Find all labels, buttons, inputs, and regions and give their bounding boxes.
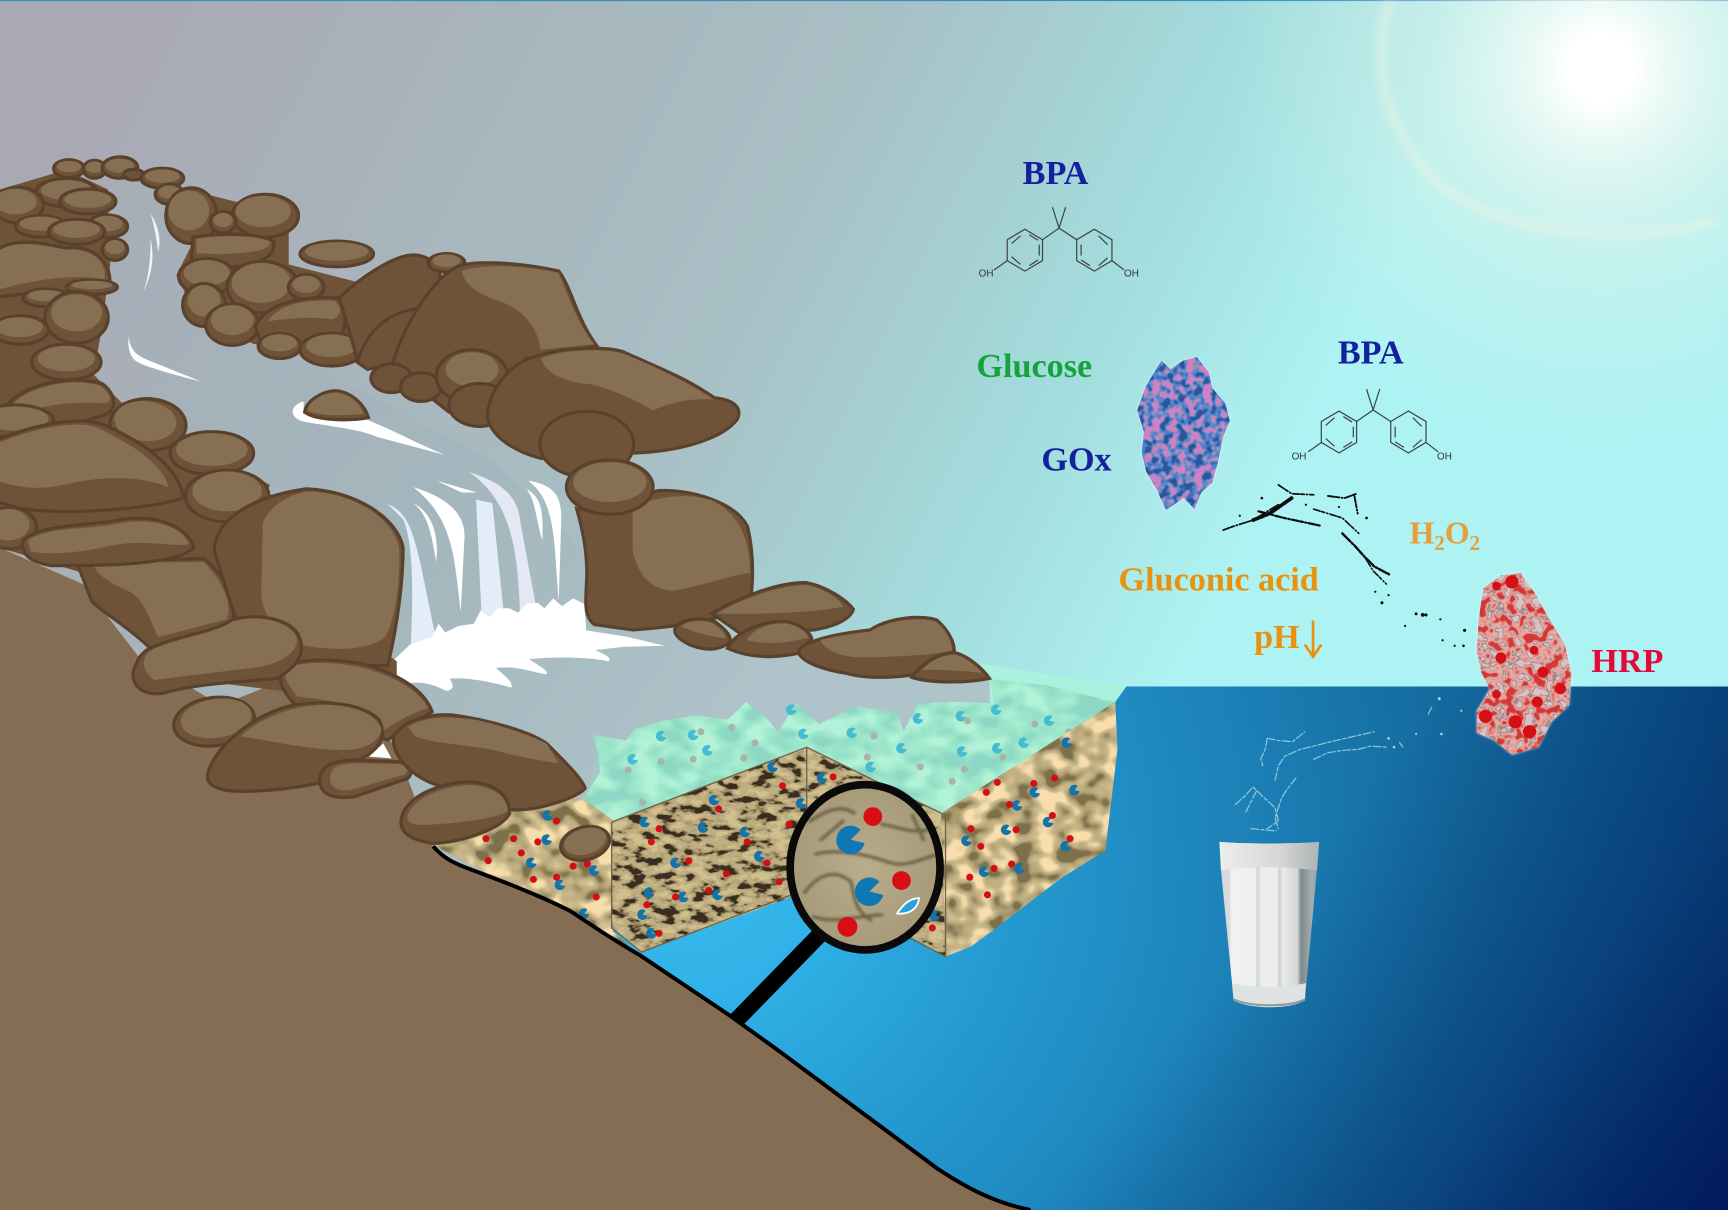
porous composite block	[435, 663, 1126, 961]
right pillar	[577, 490, 753, 630]
sun glow	[1212, 0, 1728, 452]
hillside black edge	[433, 846, 1030, 1210]
glass base shadow	[1234, 1000, 1305, 1005]
HRP active red patches	[1479, 575, 1566, 738]
block left face	[435, 798, 645, 961]
lens fill	[790, 785, 940, 950]
pH label: pH	[1254, 619, 1300, 656]
rock mass backing: middle stack	[170, 190, 375, 364]
sea deep corner shading	[595, 687, 1728, 1210]
H2O2 label: 2	[1434, 531, 1445, 555]
water surface band	[1219, 842, 1319, 871]
red nanoparticles inside block	[482, 773, 1074, 937]
rocks: lower slope	[133, 617, 616, 867]
sea	[595, 687, 1728, 1210]
large boulder left	[339, 255, 440, 359]
lens rim	[790, 785, 940, 950]
hillside	[0, 548, 1030, 1210]
BPA molecule upper: OH	[979, 269, 993, 280]
rocks: right ledge	[675, 583, 989, 682]
glass of clean water	[1219, 842, 1319, 1007]
rock mass backing: left stack	[0, 170, 397, 705]
magnified water pocket	[897, 898, 919, 914]
large boulder overhang	[487, 348, 739, 459]
BPA molecule upper: OH	[1124, 269, 1139, 280]
glass base	[1232, 983, 1306, 1006]
H2O2 label: O	[1445, 515, 1470, 550]
block edges	[612, 747, 946, 957]
enzymes on top surface	[627, 704, 1054, 772]
block right face	[941, 702, 1117, 957]
BPA molecule lower	[1292, 389, 1452, 463]
block middle face	[612, 747, 807, 952]
block narrow face	[807, 747, 946, 957]
top edge line	[0, 0, 1728, 2]
sun halo ring	[1381, 0, 1719, 234]
glass body	[1219, 842, 1319, 1007]
waterfall foam	[389, 598, 665, 691]
lens texture	[804, 809, 935, 920]
waterfall streaks	[128, 214, 561, 644]
green hydrated top surface	[583, 679, 1115, 822]
rocks: upper-left stack	[0, 157, 403, 666]
pale dots on top surface	[625, 717, 1072, 806]
GOx label: GOx	[1041, 442, 1112, 479]
floating rock	[300, 241, 374, 267]
river behind the rocks	[110, 182, 992, 810]
magnifying lens	[790, 785, 940, 950]
pH down arrow	[1305, 620, 1321, 657]
rocks: upper-middle stack	[166, 188, 753, 630]
magnified enzyme and nanoparticles	[836, 826, 865, 854]
blue enzymes inside block	[526, 737, 1080, 939]
H2O2 label: H	[1409, 515, 1434, 550]
magnifier handle	[734, 934, 820, 1023]
black splash: hydrogen peroxide stream	[1223, 485, 1466, 647]
BPA label lower: BPA	[1338, 335, 1404, 372]
BPA molecule lower: OH	[1437, 452, 1452, 463]
rock in stream	[305, 391, 368, 420]
pale splash droplets	[1387, 697, 1462, 748]
mint translucent top layer	[980, 663, 1126, 705]
Gluconic acid label: Gluconic acid	[1119, 562, 1319, 599]
pale splash: purified water stream	[1235, 705, 1433, 831]
BPA label upper: BPA	[1023, 155, 1089, 192]
HRP label: HRP	[1591, 643, 1663, 680]
BPA molecule upper	[979, 207, 1139, 280]
BPA molecule lower: OH	[1292, 452, 1306, 463]
GOx enzyme	[1137, 357, 1230, 510]
large boulder top	[393, 263, 597, 412]
HRP enzyme	[1477, 573, 1571, 755]
Glucose label: Glucose	[976, 348, 1092, 385]
H2O2 label: 2	[1470, 531, 1480, 555]
